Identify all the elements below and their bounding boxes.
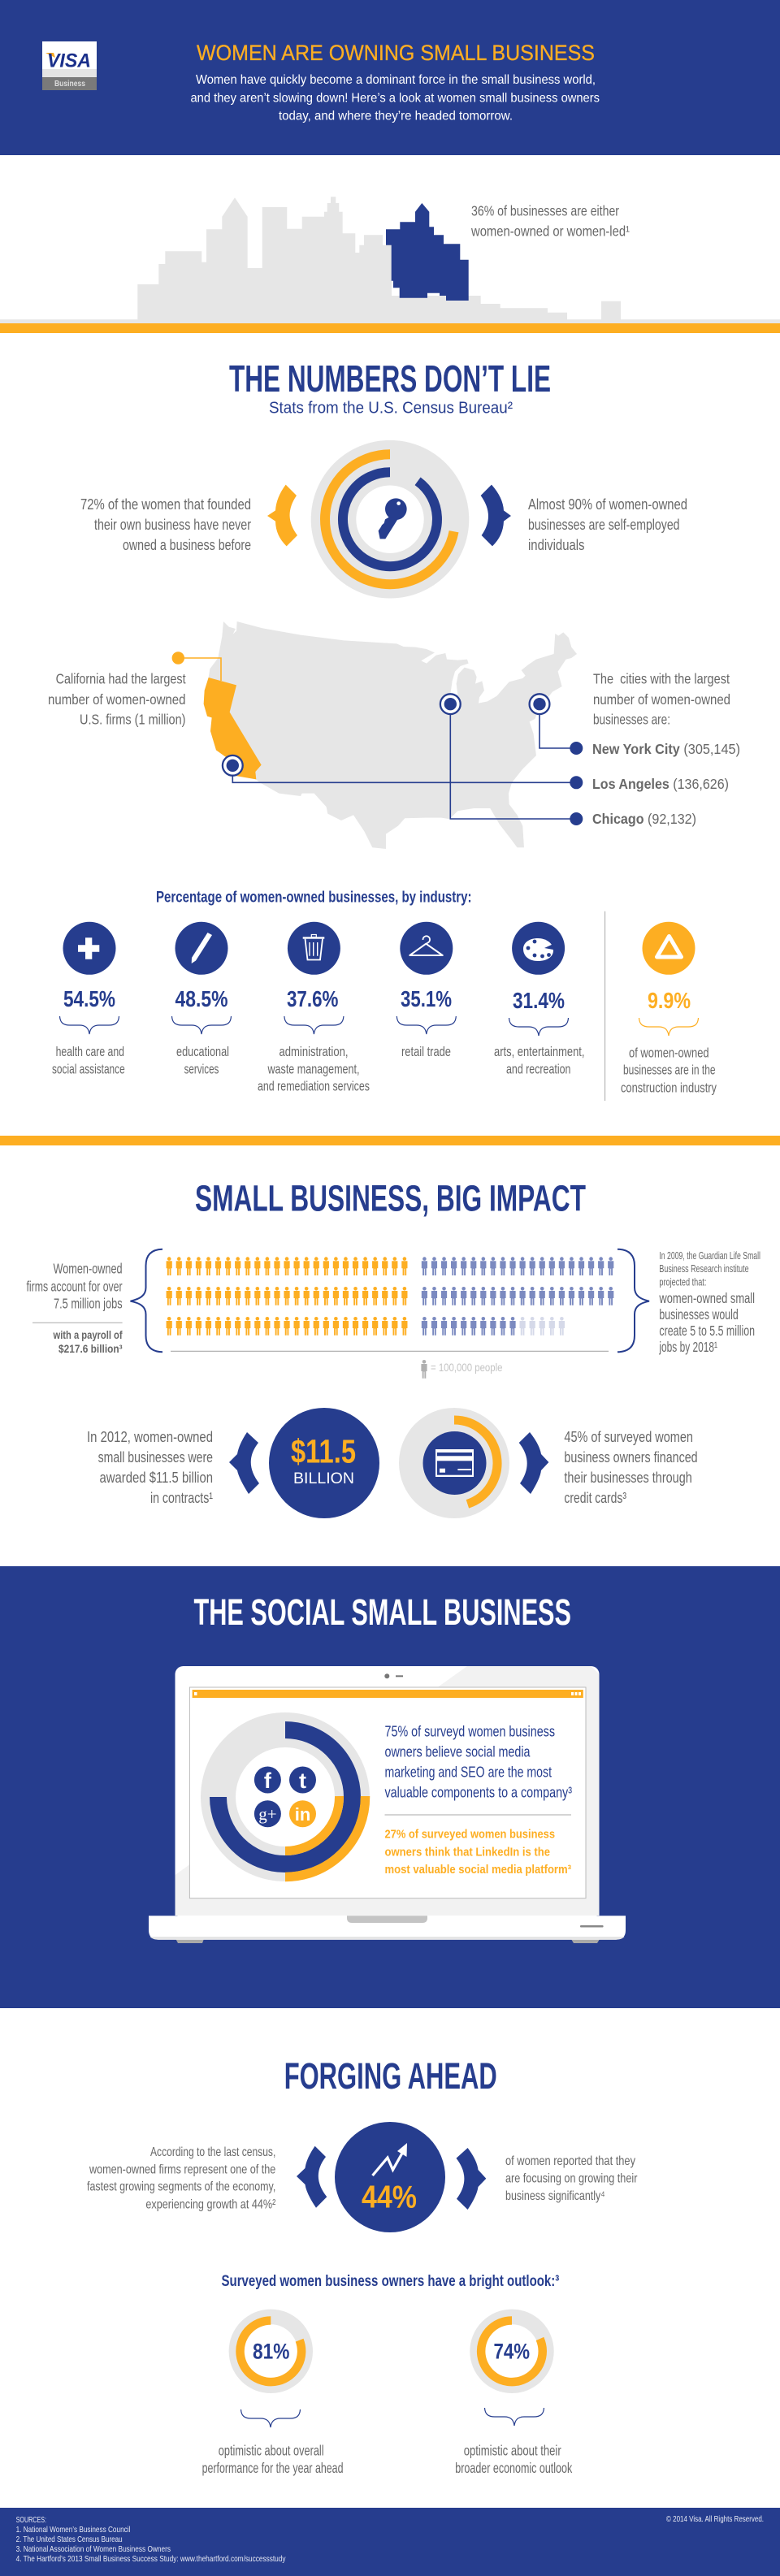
intro text: Women have quickly become a dominant force in the small business world, (196, 73, 596, 87)
text: largest cities: number of women-owned (593, 691, 730, 708)
heading: percentage by industry: Percentage of women-owned businesses, by industry: (156, 890, 471, 907)
sources (16, 2515, 286, 2564)
text: women-owned jobs: firms account for over (26, 1278, 123, 1294)
text: 44% of women: of women reported that they (505, 2154, 635, 2168)
subheading: Stats from the U.S. Census Bureau² (269, 400, 513, 418)
icon: linkedin (289, 1800, 316, 1827)
sources: SOURCES: (16, 2515, 46, 2525)
ring chart: 74% (494, 2339, 530, 2363)
city list: New York City (305,145) (592, 741, 740, 757)
badge: $11.5 billion (269, 1408, 379, 1518)
label: construction industry (621, 1080, 717, 1095)
text: census growth: fastest growing segments of the economy, (87, 2180, 275, 2194)
subheading: bright outlook: Surveyed women business owners have a bright outlook:³ (221, 2273, 559, 2290)
text: 44% of women (505, 2154, 638, 2203)
brace (484, 2408, 544, 2426)
label (52, 1045, 125, 1076)
skyline text: women-owned or women-led¹ (470, 223, 630, 240)
arrow: left bracket (297, 2146, 327, 2208)
brace (284, 1016, 344, 1034)
text: 27% stat: most valuable social media platform³ (385, 1864, 571, 1877)
text: largest cities (593, 671, 730, 727)
text: 75% stat: 75% of surveyd women business (385, 1722, 555, 1739)
line end dots (570, 742, 583, 825)
panel: construction (605, 911, 717, 1101)
panel: 74% outlook (455, 2310, 572, 2476)
value: 48.5% (176, 986, 228, 1011)
icon: palette (512, 922, 565, 975)
text: women-owned jobs: Women-owned (54, 1261, 123, 1277)
brace (509, 1018, 569, 1036)
pictogram: projected jobs (422, 1257, 613, 1336)
icon: linkedin: in (295, 1804, 310, 1825)
intro text (190, 73, 600, 123)
badge: $11.5 billion: $11.5 (291, 1433, 356, 1470)
city list: Chicago (92,132) (592, 811, 696, 827)
panel: arts (494, 922, 585, 1076)
label: waste management, (267, 1062, 359, 1076)
sources: 1. National Women’s Business Council (16, 2525, 130, 2535)
legend: = 100,000 people (431, 1361, 503, 1374)
logo: Visa Business (42, 41, 97, 90)
badge: 44% (335, 2122, 445, 2232)
label: and remediation services (258, 1080, 370, 1094)
value: 37.6% (287, 986, 338, 1011)
text: 75% stat: valuable components to a company³ (385, 1783, 572, 1800)
text: projection: projected that: (659, 1276, 706, 1288)
label: of women-owned (629, 1046, 709, 1060)
pin: Chicago (440, 694, 461, 714)
panel: health care (52, 922, 125, 1076)
text: contracts: in contracts¹ (150, 1489, 213, 1506)
map of the United States (204, 621, 577, 849)
sources: 3. National Association of Women Business Owners (16, 2544, 171, 2554)
skyline text: 36% of businesses are either (471, 203, 619, 219)
text: census growth: According to the last census, (150, 2145, 275, 2159)
value: 35.1% (401, 986, 452, 1011)
label: broader economic outlook (455, 2460, 572, 2476)
panel: US map (172, 621, 583, 849)
pin: Los Angeles (223, 755, 243, 776)
panel: administration (258, 922, 370, 1094)
text: 27% stat (385, 1828, 571, 1877)
text: California (48, 671, 186, 727)
ring chart (470, 2310, 554, 2393)
icon: facebook (254, 1766, 281, 1794)
value: 9.9% (648, 988, 691, 1013)
text: 90% self-employed (528, 496, 687, 553)
text: 72% founders: 72% of the women that founded (80, 496, 251, 513)
text: 90% self-employed: individuals (528, 537, 585, 553)
chart: credit card ring (399, 1408, 509, 1518)
icon: key (379, 498, 407, 539)
text: credit cards: business owners financed (564, 1448, 698, 1466)
text: census growth (87, 2145, 276, 2211)
brace (639, 1018, 699, 1036)
panel: 81% outlook (202, 2310, 343, 2476)
heading: small business big impact: SMALL BUSINESS, BIG IMPACT (195, 1178, 586, 1219)
icon: twitter: t (299, 1769, 306, 1793)
orange divider bar (0, 1136, 780, 1145)
city list (592, 741, 740, 827)
panel: retail trade (396, 922, 456, 1059)
label (621, 1046, 717, 1095)
ring chart: 81% (253, 2339, 289, 2363)
logo: Visa Business: VISA (47, 50, 91, 71)
text: contracts: In 2012, women-owned (87, 1428, 213, 1445)
text: women-owned jobs: $217.6 billion³ (58, 1343, 123, 1355)
icon: google plus: g+ (258, 1804, 277, 1824)
value: 31.4% (513, 988, 565, 1013)
California (204, 678, 262, 779)
text: 44% of women: business significantly⁴ (505, 2189, 605, 2203)
arrow: left bracket (229, 1432, 259, 1494)
icon: credit card (436, 1449, 474, 1477)
icon: facebook: f (264, 1769, 272, 1793)
brace (240, 2409, 301, 2427)
label: businesses are in the (623, 1063, 716, 1078)
arrow: right bracket (519, 1432, 548, 1494)
text: contracts (87, 1428, 213, 1506)
orange divider bar (0, 323, 780, 333)
badge: 44%: 44% (362, 2180, 417, 2214)
right brace (618, 1249, 649, 1352)
pin: New York (530, 694, 549, 714)
text: 72% founders: owned a business before (123, 537, 251, 553)
text: 75% stat: marketing and SEO are the most (385, 1763, 552, 1780)
text: projection: businesses would (659, 1306, 739, 1323)
text: contracts: small businesses were (98, 1448, 213, 1466)
panel: key ring chart (311, 440, 469, 598)
text: women-owned jobs: with a payroll of (53, 1329, 123, 1341)
pictogram: current jobs (167, 1257, 407, 1336)
text: California: California had the largest (56, 671, 186, 687)
text: women-owned jobs: 7.5 million jobs (54, 1296, 123, 1312)
label: and recreation (506, 1062, 570, 1076)
brace (172, 1016, 231, 1034)
text: largest cities: businesses are: (593, 711, 670, 727)
label: performance for the year ahead (202, 2460, 343, 2476)
city list: Los Angeles (136,626) (592, 776, 729, 792)
text: projection (659, 1250, 760, 1355)
skyline chart (0, 197, 780, 323)
text: 27% stat: 27% of surveyed women business (385, 1828, 555, 1841)
text: credit cards: credit cards³ (564, 1489, 626, 1506)
left brace (130, 1249, 162, 1352)
label: optimistic about their (464, 2442, 561, 2458)
label: social assistance (52, 1062, 125, 1076)
laptop (149, 1666, 626, 1943)
title: WOMEN ARE OWNING SMALL BUSINESS (197, 41, 595, 65)
badge: $11.5 billion: BILLION (293, 1470, 354, 1487)
icon: pencil (176, 922, 228, 975)
icon: triangle (642, 922, 696, 975)
label (258, 1045, 370, 1094)
label: administration, (280, 1045, 348, 1059)
text: 75% stat (385, 1722, 572, 1800)
text: credit cards (564, 1428, 698, 1506)
text: 75% stat: owners believe social media (385, 1743, 531, 1760)
panel: the social small business (0, 1566, 780, 2008)
sources: 2. The United States Census Bureau (16, 2535, 123, 2544)
label (494, 1045, 585, 1076)
panel: header banner (0, 0, 780, 155)
panel: skyline stat (0, 197, 780, 323)
text: 90% self-employed: businesses are self-employed (528, 517, 679, 533)
skyline text (470, 203, 630, 240)
icon: trash can (288, 922, 340, 975)
text: largest cities: The cities with the largest (593, 671, 730, 687)
brace (396, 1016, 456, 1034)
text: 72% founders: their own business have never (94, 517, 251, 533)
label: retail trade (401, 1045, 451, 1059)
heading: the numbers don't lie: THE NUMBERS DON’T LIE (229, 357, 551, 400)
connector lines (232, 715, 576, 819)
label: educational (176, 1045, 229, 1059)
brace (60, 1016, 119, 1034)
text: women-owned jobs (26, 1261, 123, 1355)
sources: 4. The Hartford’s 2013 Small Business Success Study: www.thehartford.com/successstudy (16, 2554, 286, 2564)
icon: plus (63, 922, 115, 975)
label: health care and (56, 1045, 124, 1059)
logo: Visa Business: Business (54, 80, 85, 89)
heading: THE SOCIAL SMALL BUSINESS (193, 1591, 571, 1633)
label: services (184, 1062, 219, 1076)
icon: google plus (254, 1800, 281, 1827)
ring chart (229, 2310, 313, 2393)
text: California: U.S. firms (1 million) (80, 711, 185, 727)
legend (421, 1360, 503, 1379)
text: credit cards: 45% of surveyed women (564, 1428, 693, 1445)
panel: footer (0, 2508, 780, 2576)
text: census growth: experiencing growth at 44%² (145, 2197, 276, 2211)
icon: growth arrow (372, 2150, 404, 2176)
text: 27% stat: owners think that LinkedIn is the (385, 1846, 550, 1859)
icon: twitter (289, 1766, 316, 1794)
arrow: right bracket (457, 2148, 486, 2210)
text: California: number of women-owned (48, 691, 185, 708)
label: arts, entertainment, (494, 1045, 585, 1059)
intro text: and they aren’t slowing down! Here’s a look at women small business owners (190, 91, 600, 106)
intro text: today, and where they’re headed tomorrow. (279, 109, 513, 123)
California connector (172, 652, 221, 681)
arrow: orange left bracket (267, 485, 297, 546)
arrow: blue right bracket (481, 485, 511, 546)
text: 72% founders (80, 496, 251, 553)
label (202, 2442, 343, 2476)
value: 54.5% (63, 986, 115, 1011)
label (176, 1045, 229, 1076)
text: census growth: women-owned firms represent one of the (89, 2163, 275, 2176)
text: credit cards: their businesses through (564, 1469, 692, 1486)
chart: social donut (201, 1712, 370, 1881)
panel: educational services (172, 922, 231, 1076)
text: 44% of women: are focusing on growing their (505, 2172, 638, 2186)
icon: hanger (400, 922, 453, 975)
text: contracts: awarded $11.5 billion (99, 1469, 213, 1486)
label: optimistic about overall (219, 2442, 324, 2458)
heading: forging ahead: FORGING AHEAD (284, 2055, 497, 2097)
text: 90% self-employed: Almost 90% of women-owned (528, 496, 687, 513)
text: projection: jobs by 2018¹ (659, 1339, 717, 1355)
label (455, 2442, 572, 2476)
